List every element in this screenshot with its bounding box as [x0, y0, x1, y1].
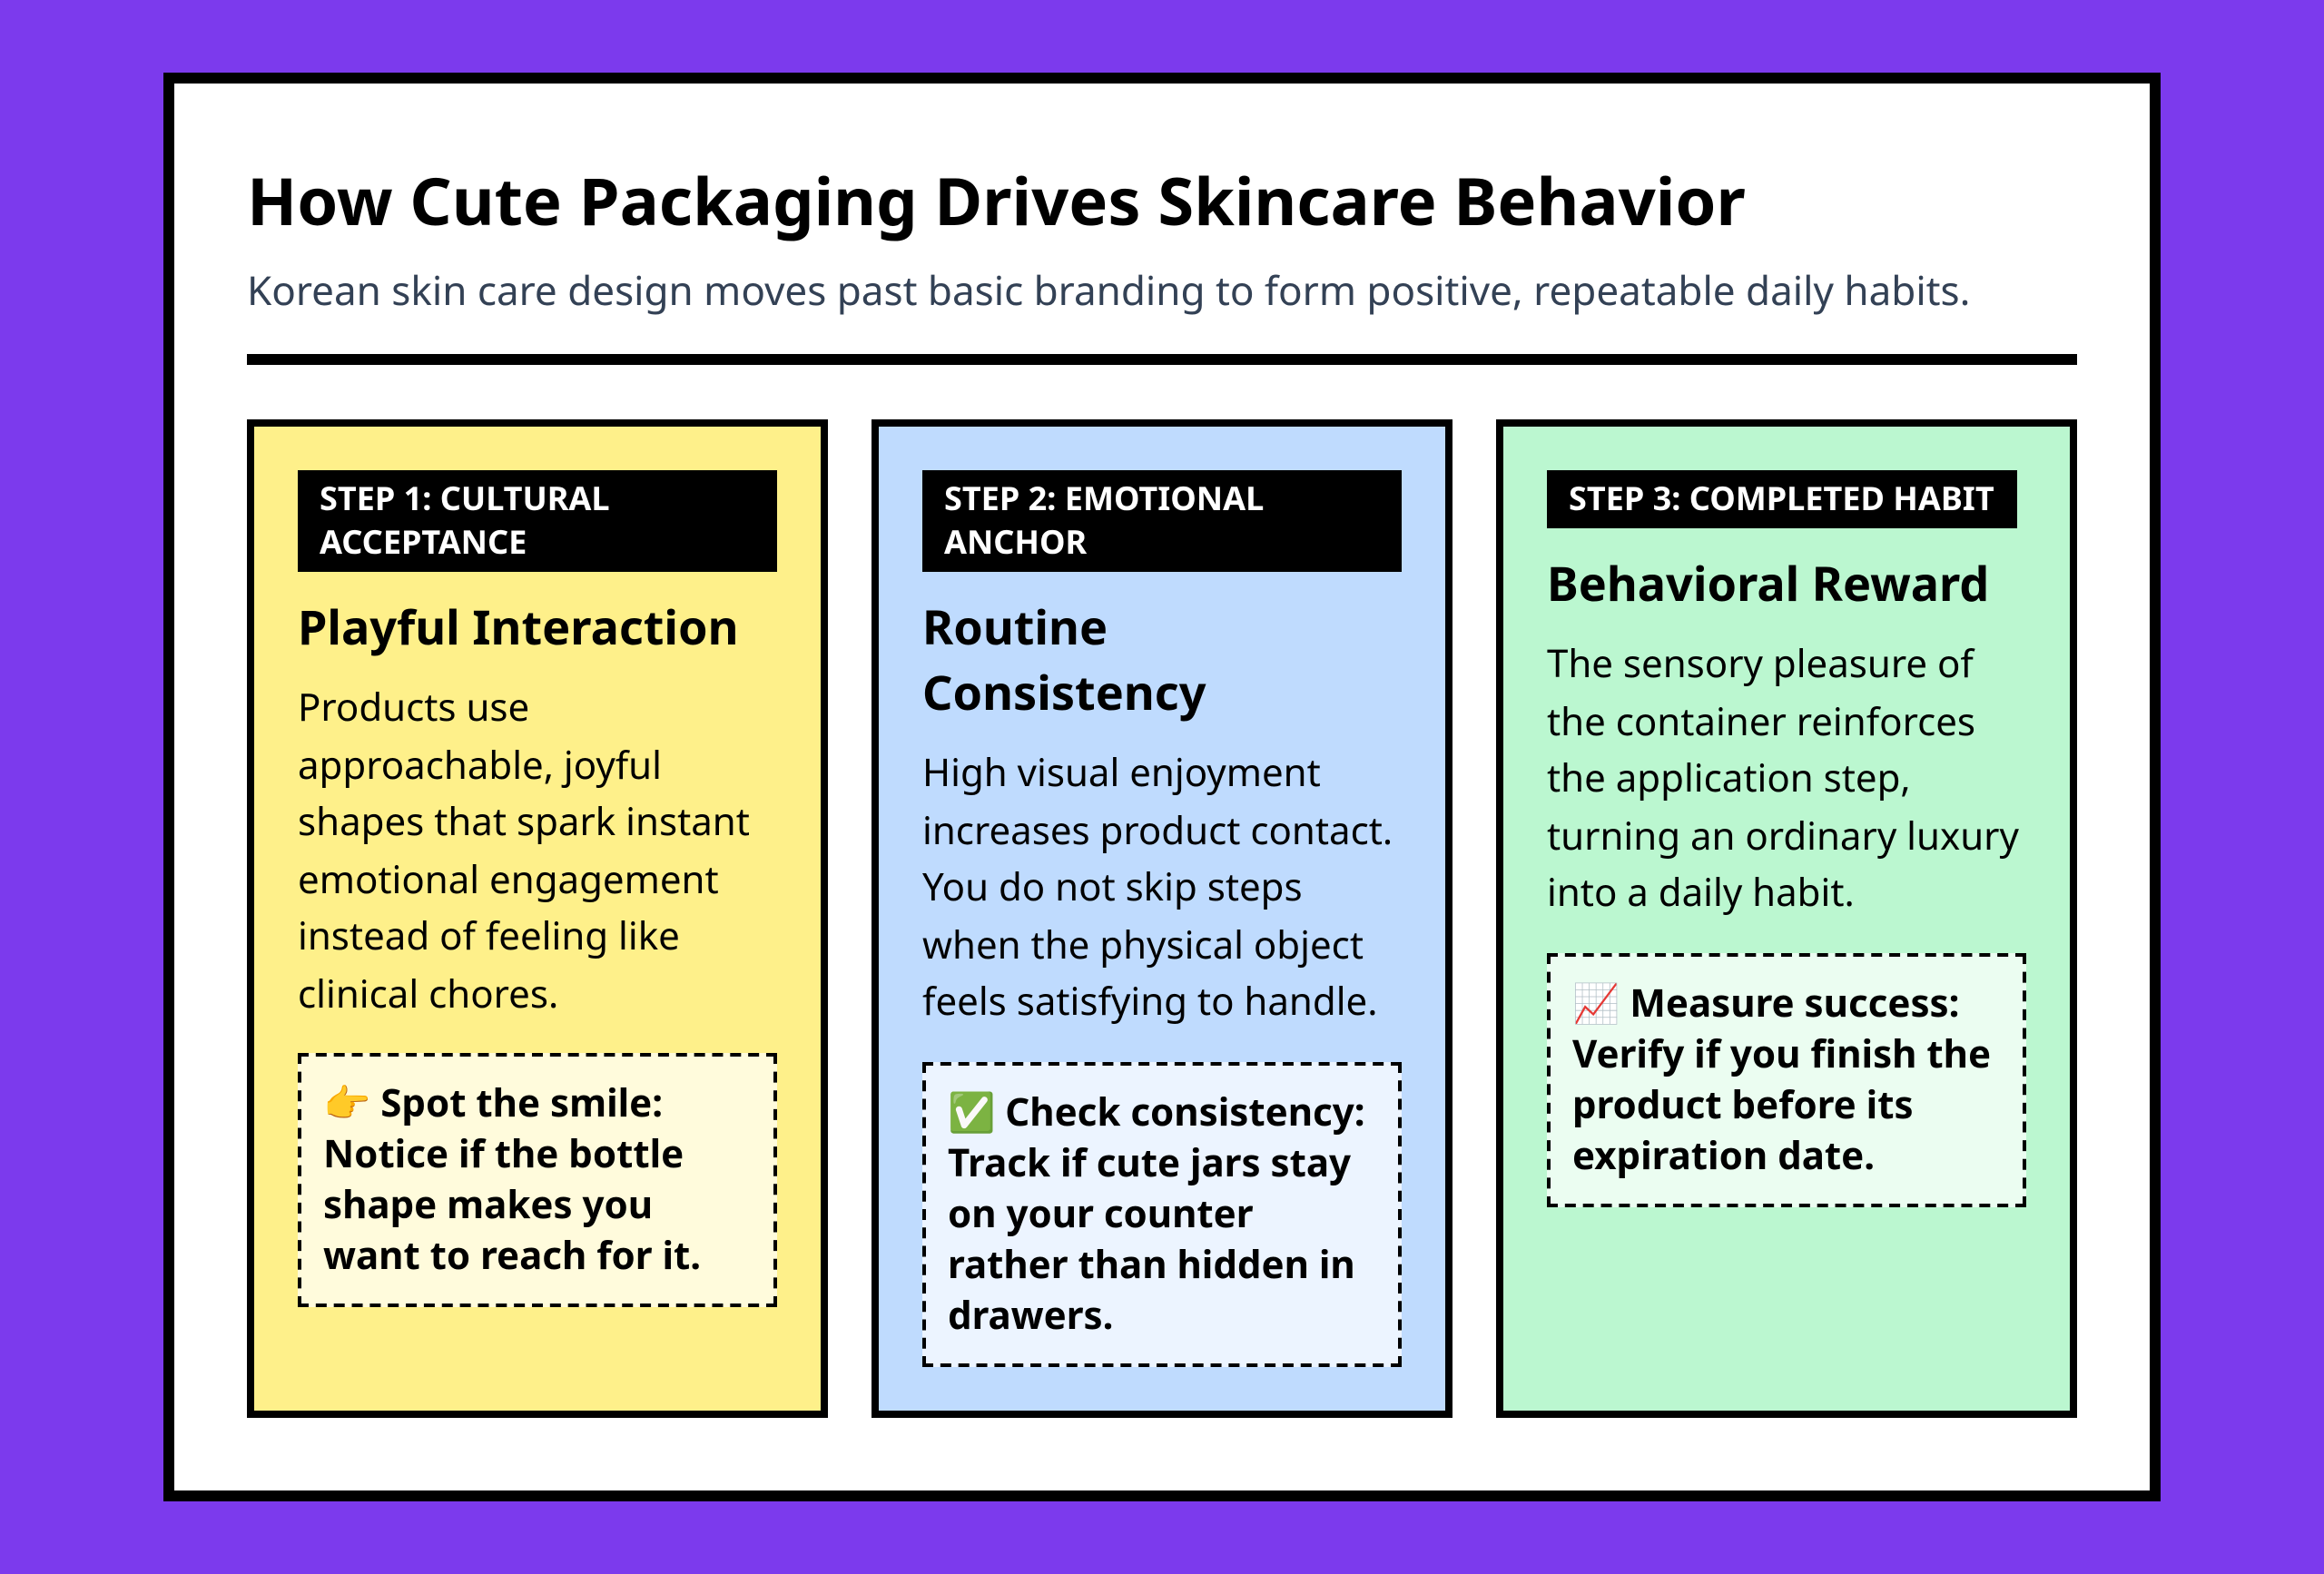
subtitle: Korean skin care design moves past basic branding to form positive, repeatable daily habits.	[247, 263, 1970, 318]
panel: step 2	[872, 419, 1452, 1418]
step 2 tag	[922, 470, 1402, 572]
infographic frame	[163, 73, 2161, 1501]
step 3 callout: 📈 Measure success: Verify if you finish the product before its expiration date.	[1572, 978, 1991, 1181]
title: How Cute Packaging Drives Skincare Behavior	[247, 154, 1746, 245]
step 2 tag: STEP 2: EMOTIONAL ANCHOR	[944, 477, 1264, 565]
panel: step 3	[1496, 419, 2077, 1418]
step 3 callout	[1547, 952, 2026, 1206]
step 3 tag	[1547, 470, 2017, 528]
step 1 heading: Playful Interaction	[298, 594, 739, 659]
step 1 description: Products use approachable, joyful shapes that spark instant emotional engagement instead of feeling like clinical chores.	[298, 683, 750, 1019]
step 3 description: The sensory pleasure of the container reinforces the application step, turning an ordinary luxury into a daily habit.	[1547, 639, 2019, 919]
three step cards	[247, 419, 2077, 1418]
step 2 heading: Routine Consistency	[922, 594, 1206, 725]
step 1 callout	[298, 1053, 777, 1307]
step 1 tag: STEP 1: CULTURAL ACCEPTANCE	[320, 477, 610, 565]
step 3 tag: STEP 3: COMPLETED HABIT	[1569, 477, 1994, 521]
step 1 tag	[298, 470, 777, 572]
step 3 heading: Behavioral Reward	[1547, 550, 1989, 615]
panel: step 1	[247, 419, 828, 1418]
step 2 callout: ✅ Check consistency: Track if cute jars stay on your counter rather than hidden in drawers.	[948, 1087, 1365, 1342]
step 1 callout: 👉 Spot the smile: Notice if the bottle shape makes you want to reach for it.	[323, 1078, 701, 1282]
step 2 description: High visual enjoyment increases product contact. You do not skip steps when the physical object feels satisfying to handle.	[922, 749, 1393, 1028]
